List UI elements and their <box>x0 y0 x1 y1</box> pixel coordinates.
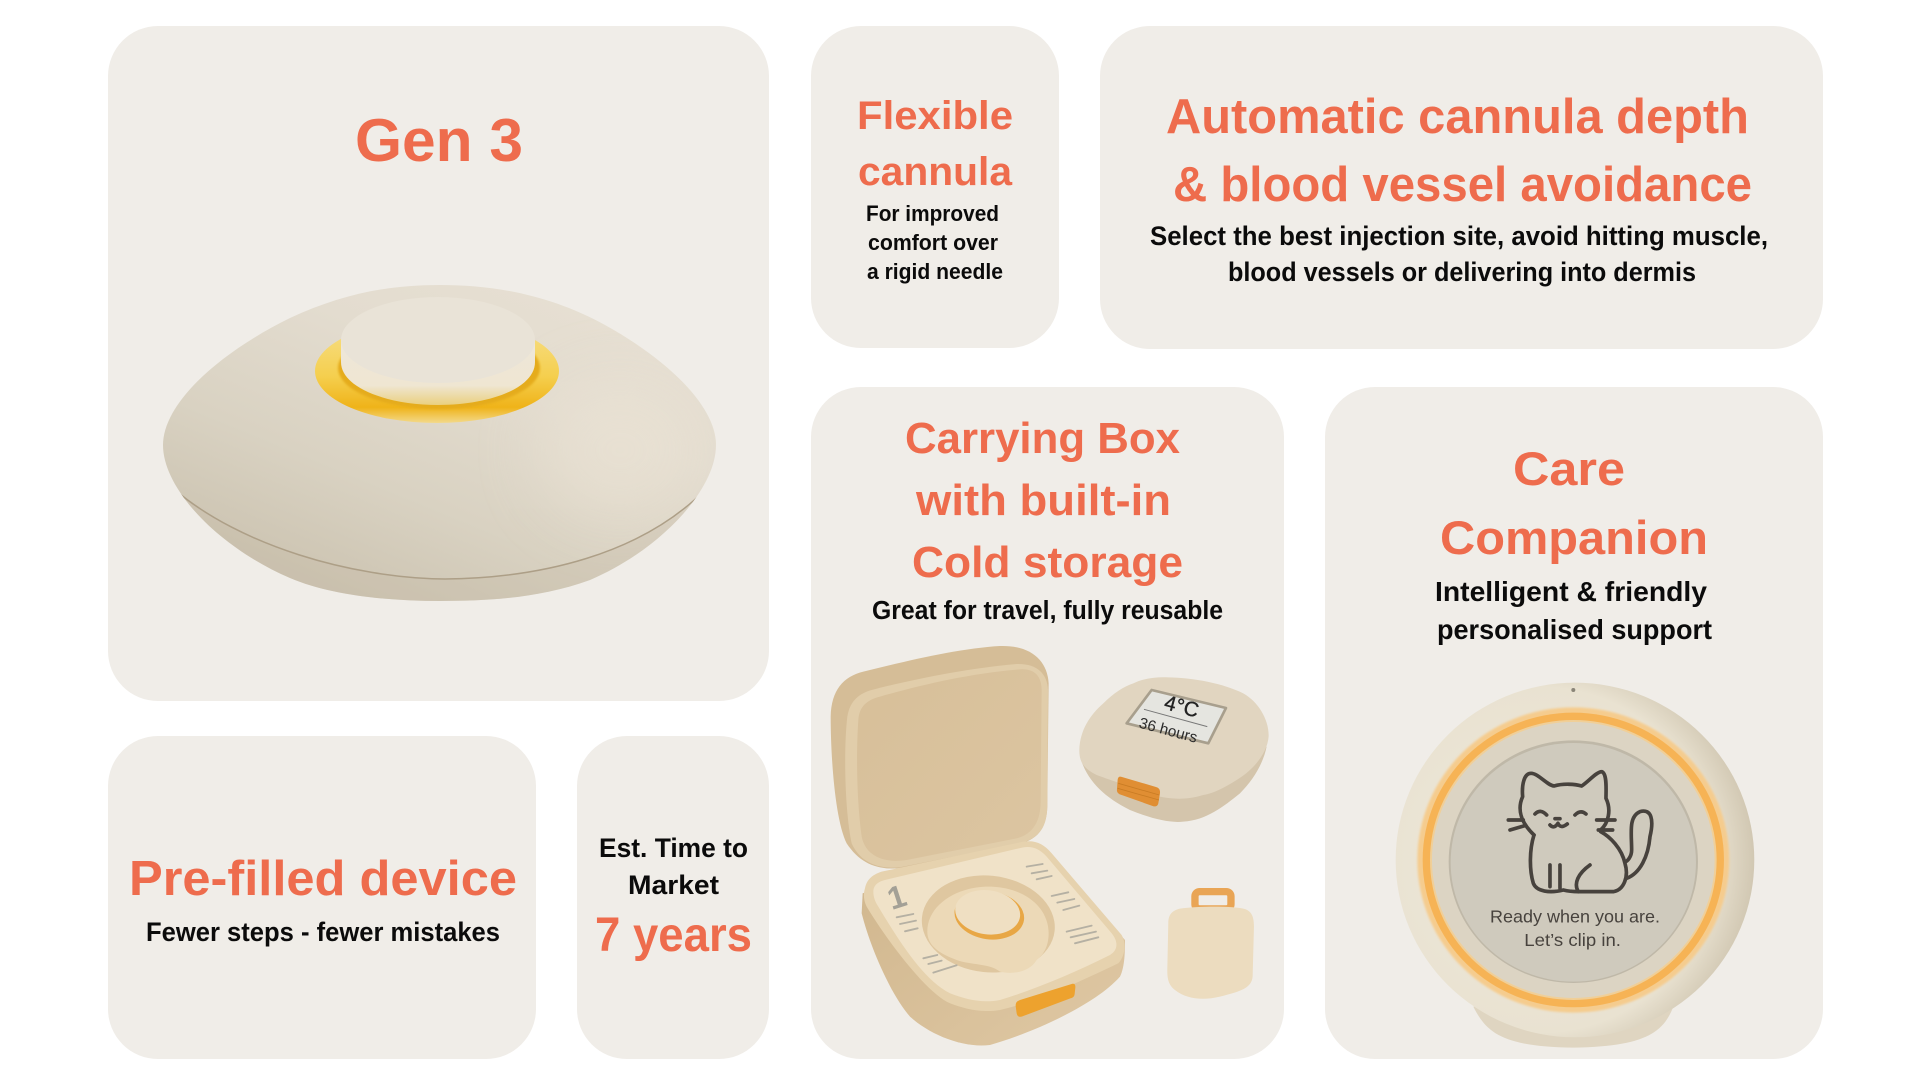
panel: Carrying Box <box>811 387 1284 1059</box>
panel: Care Companion <box>1325 387 1823 1059</box>
cooler with temperature display <box>1079 677 1269 822</box>
heading: Care Companion: Companion <box>1440 511 1708 564</box>
text: injection site description: blood vessels or delivering into dermis <box>1228 257 1696 287</box>
text: Est. Time to Market: Est. Time to <box>599 833 748 863</box>
cooler with temperature display: 4°C <box>1162 691 1201 722</box>
heading: Gen 3: Gen 3 <box>355 107 523 174</box>
heading: Carrying Box with built-in Cold storage: Carrying Box <box>905 414 1181 463</box>
open carrying box: 1 <box>883 877 911 917</box>
heading: Carrying Box with built-in Cold storage: Cold storage <box>912 538 1183 587</box>
text: flexible cannula description: comfort over <box>868 230 998 255</box>
illustration: carrying box products <box>831 646 1269 1045</box>
screen text: Ready when you are. <box>1490 907 1660 927</box>
small keychain case <box>1167 892 1254 999</box>
heading: Care Companion: Care <box>1513 442 1625 495</box>
illustration: companion device with cat <box>1396 683 1754 1048</box>
heading: Carrying Box with built-in Cold storage: with built-in <box>915 476 1171 525</box>
text: care companion description: Intelligent & friendly <box>1435 576 1707 607</box>
text: injection site description <box>1150 221 1768 287</box>
heading: Automatic cannula depth <box>1166 90 1752 212</box>
text: care companion description: personalised support <box>1437 614 1712 645</box>
heading: Flexible cannula <box>857 94 1013 194</box>
text: Est. Time to Market: Market <box>628 870 719 900</box>
screen text <box>1490 907 1660 950</box>
text: Est. Time to Market <box>599 833 748 900</box>
panel: Pre-filled device <box>108 736 536 1059</box>
open carrying box <box>831 646 1125 1045</box>
text: flexible cannula description <box>866 201 1003 284</box>
text: carrying box description: Great for travel, fully reusable <box>872 597 1223 625</box>
heading: Care Companion <box>1440 442 1708 564</box>
heading: Flexible cannula: cannula <box>858 150 1013 194</box>
heading: Pre-filled device: Pre-filled device <box>129 852 517 906</box>
panel: Flexible cannula <box>811 26 1059 348</box>
stat: 7 years: 7 years <box>595 909 752 962</box>
device: Gen 3 injector <box>160 285 720 610</box>
panel: Automatic cannula depth <box>1100 26 1823 349</box>
cooler with temperature display: 36 hours <box>1137 715 1199 747</box>
icon: cat <box>1508 772 1652 892</box>
screen text: Let’s clip in. <box>1524 930 1621 950</box>
text: flexible cannula description: For improved <box>866 201 999 226</box>
text: flexible cannula description: a rigid needle <box>867 259 1003 284</box>
panel: Gen 3 <box>108 26 769 701</box>
heading: Automatic cannula depth: Automatic cannula depth <box>1166 90 1749 144</box>
heading: Carrying Box with built-in Cold storage <box>905 414 1183 587</box>
text: fewer steps: Fewer steps - fewer mistakes <box>146 917 500 947</box>
heading: Flexible cannula: Flexible <box>857 94 1013 138</box>
heading: Automatic cannula depth: & blood vessel avoidance <box>1173 158 1752 212</box>
panel: Est. Time to Market <box>577 736 769 1059</box>
text: care companion description <box>1435 576 1712 645</box>
text: injection site description: Select the best injection site, avoid hitting muscle, <box>1150 221 1768 251</box>
